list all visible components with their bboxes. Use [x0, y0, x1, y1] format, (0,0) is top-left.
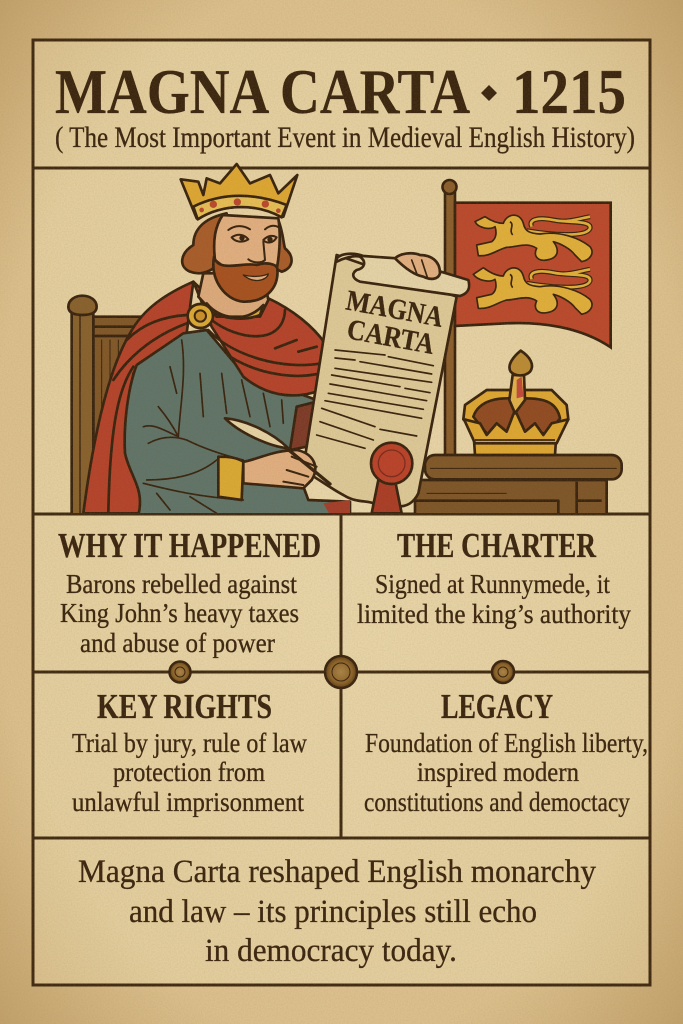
panel: the charter	[357, 526, 631, 629]
wax seal	[371, 443, 412, 513]
panel: legacy: LEGACY	[441, 687, 553, 726]
medallions	[170, 656, 514, 688]
title: MAGNA CARTA	[55, 56, 470, 127]
hair	[182, 213, 292, 273]
panel: legacy: constitutions and democtacy	[364, 787, 630, 817]
panel: the charter: limited the king’s authority	[357, 599, 631, 629]
panel: key rights: KEY RIGHTS	[97, 687, 272, 726]
draped cloak	[193, 282, 325, 395]
crown	[181, 164, 297, 219]
flag pole	[442, 180, 456, 458]
panel: key rights: protection from	[113, 757, 265, 787]
panel: the charter: THE CHARTER	[397, 526, 597, 565]
scroll top roll	[337, 254, 469, 296]
grid lines	[33, 168, 650, 838]
panel: closing statement: Magna Carta reshaped English monarchy	[78, 854, 596, 890]
panel: closing statement: in democracy today.	[205, 933, 457, 969]
panel: key rights: Trial by jury, rule of law	[72, 728, 307, 758]
panel: why it happened: WHY IT HAPPENED	[58, 526, 321, 565]
hand on scroll	[395, 253, 440, 279]
panel: why it happened: and abuse of power	[80, 628, 275, 658]
illustration panel	[68, 164, 622, 517]
panel: why it happened: Barons rebelled against	[66, 569, 297, 599]
title diamond	[481, 85, 497, 101]
panel: closing statement: and law – its principles still echo	[129, 894, 537, 930]
table	[415, 455, 622, 515]
king figure	[68, 164, 350, 517]
centre medallion	[325, 656, 357, 688]
lion lower	[473, 268, 592, 314]
writing hand and quill	[218, 418, 330, 500]
small crown on table	[463, 351, 568, 455]
scroll title: magna: MAGNA	[344, 284, 446, 334]
scroll sheet	[303, 255, 457, 507]
panel: legacy: Foundation of English liberty,	[365, 728, 648, 758]
royal flag with lions	[455, 203, 611, 347]
tunic	[125, 330, 350, 515]
neck and collar	[198, 273, 268, 317]
chair	[68, 296, 143, 517]
panel: legacy	[364, 687, 648, 817]
panel: why it happened	[58, 526, 321, 658]
panel: why it happened: King John’s heavy taxes	[60, 598, 299, 628]
cape back	[83, 282, 193, 513]
clasp	[188, 304, 213, 328]
scroll writing lines	[317, 350, 433, 448]
panel: the charter: Signed at Runnymede, it	[375, 569, 610, 599]
panel: legacy: inspired modern	[417, 757, 579, 787]
lion upper	[475, 215, 592, 262]
panel: closing statement	[78, 854, 596, 969]
beard	[213, 257, 278, 302]
face	[214, 215, 280, 277]
title block	[55, 56, 635, 154]
scroll	[303, 253, 469, 513]
right medallion	[492, 661, 514, 683]
eyes and nose	[228, 226, 279, 262]
scroll title: carta: CARTA	[344, 313, 437, 361]
panel: key rights: unlawful imprisonment	[72, 787, 304, 817]
title year: 1215	[512, 56, 626, 127]
panel: key rights	[72, 687, 307, 817]
left medallion	[170, 662, 190, 682]
